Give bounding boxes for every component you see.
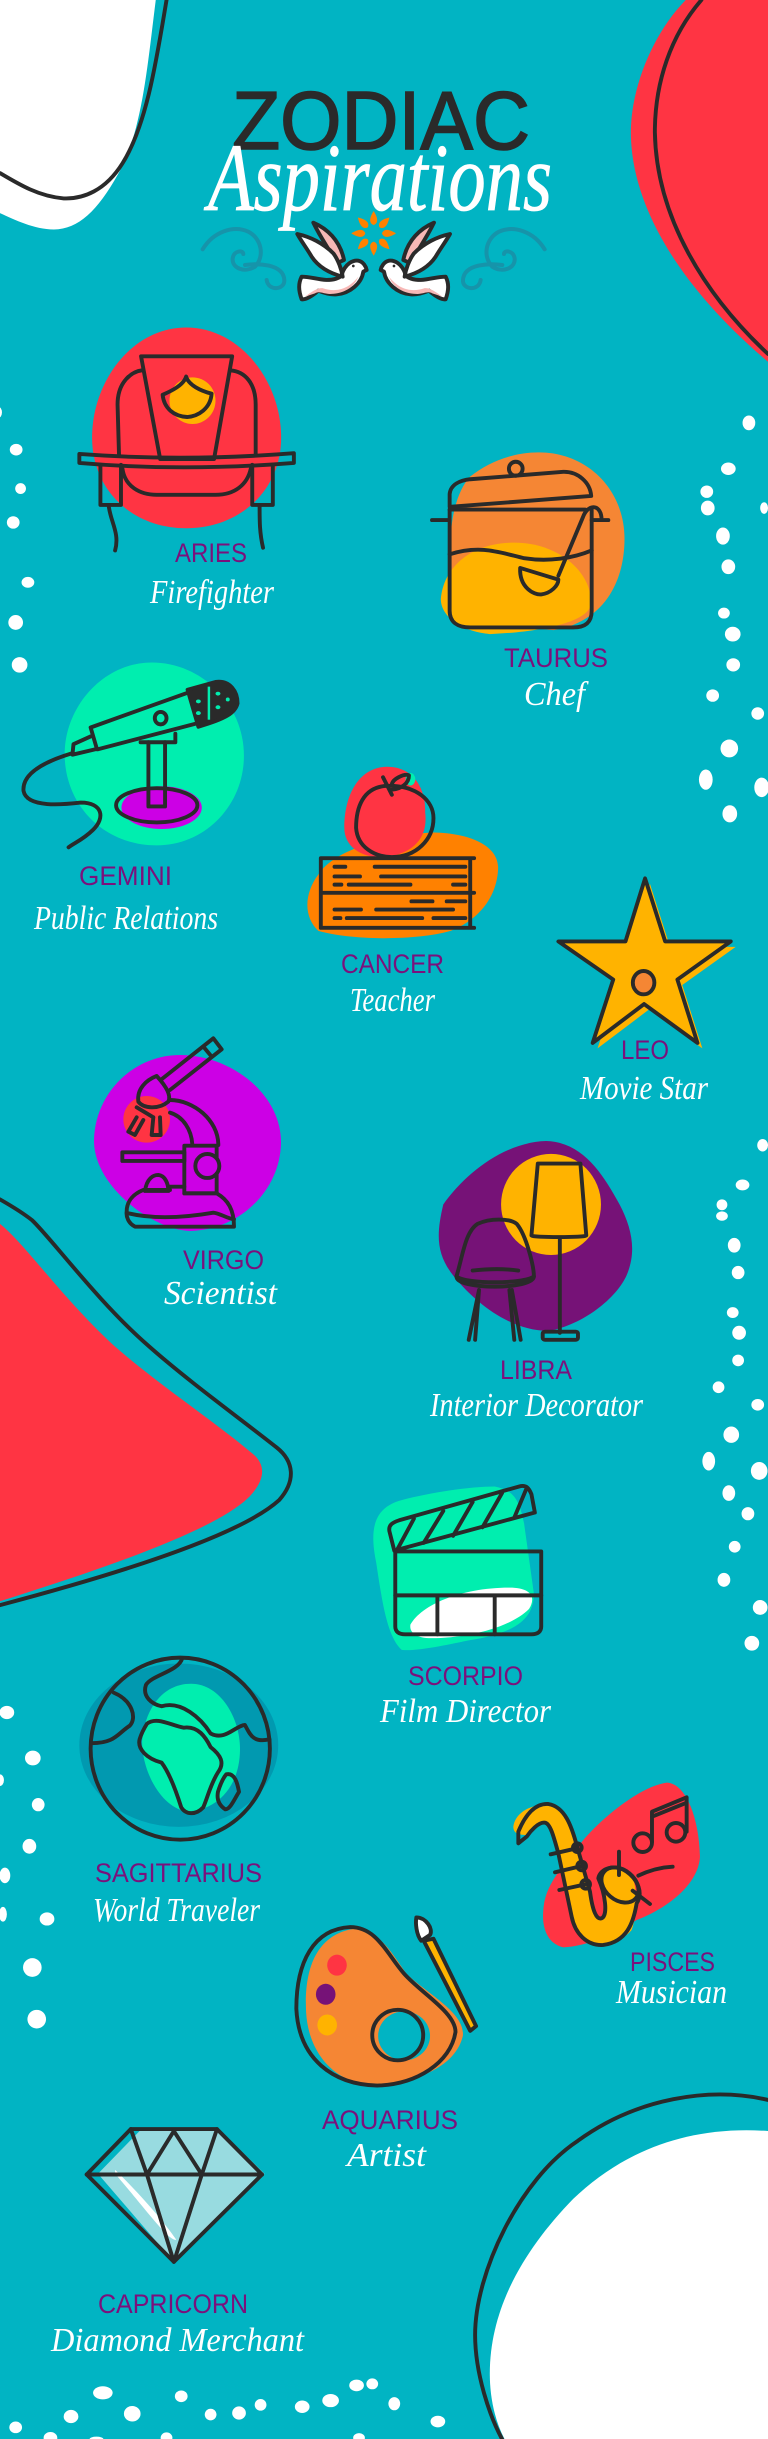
label: Scientist: Scientist xyxy=(164,1275,279,1312)
panel: pisces xyxy=(513,1783,727,2011)
label: Pisces: PISCES xyxy=(630,1947,715,1977)
label: Leo: LEO xyxy=(621,1035,669,1065)
title: Aspirations: Aspirations xyxy=(203,124,552,231)
blob: top right red xyxy=(631,0,768,362)
icon: microphone xyxy=(23,663,244,847)
icon: star xyxy=(558,878,736,1048)
panel: virgo xyxy=(94,1038,281,1312)
label: Diamond Merchant: Diamond Merchant xyxy=(50,2322,305,2359)
label: Taurus: TAURUS xyxy=(504,643,608,673)
icon: diamond xyxy=(87,2128,264,2262)
icon: clapperboard xyxy=(373,1486,541,1650)
panel: cancer xyxy=(307,767,498,1019)
label: Virgo: VIRGO xyxy=(183,1245,264,1275)
label: Film Director: Film Director xyxy=(379,1693,552,1730)
icon: paint palette and brush xyxy=(296,1917,476,2086)
panel: sagittarius xyxy=(79,1658,278,1929)
label: Movie Star: Movie Star xyxy=(579,1070,709,1107)
label: Teacher: Teacher xyxy=(350,982,436,1019)
label: Musician: Musician xyxy=(615,1974,727,2011)
label: Capricorn: CAPRICORN xyxy=(98,2289,248,2319)
icon: saxophone and notes xyxy=(513,1783,700,1947)
label: Chef: Chef xyxy=(524,676,589,713)
label: Firefighter: Firefighter xyxy=(149,574,275,611)
icon: apple on books xyxy=(307,767,498,938)
title: ZODIAC: ZODIAC xyxy=(232,74,530,167)
blob: top left white xyxy=(0,0,167,230)
label: Aquarius: AQUARIUS xyxy=(322,2105,458,2135)
icon: microscope xyxy=(94,1038,281,1231)
icon: firefighter helmet xyxy=(79,328,294,550)
panel: taurus xyxy=(432,452,624,713)
dots: bottom xyxy=(0,1839,445,2439)
label: Aries: ARIES xyxy=(175,538,247,568)
label: Cancer: CANCER xyxy=(341,949,444,979)
title block xyxy=(203,74,552,299)
dots: lower middle xyxy=(0,1238,768,1811)
icon: doves and sun ornament xyxy=(203,211,545,299)
label: World Traveler: World Traveler xyxy=(93,1892,261,1929)
label: Interior Decorator: Interior Decorator xyxy=(429,1387,644,1424)
panel: scorpio xyxy=(373,1486,552,1730)
label: Gemini: GEMINI xyxy=(79,861,172,891)
label: Scorpio: SCORPIO xyxy=(408,1661,523,1691)
panel: aries xyxy=(79,328,294,611)
panel: libra xyxy=(429,1141,644,1424)
panel: gemini xyxy=(23,663,244,937)
label: Libra: LIBRA xyxy=(500,1355,572,1385)
dots: upper middle xyxy=(8,608,768,1221)
blob: bottom right white xyxy=(475,2095,768,2439)
blob: left red xyxy=(0,1199,291,1605)
label: Sagittarius: SAGITTARIUS xyxy=(95,1858,262,1888)
dots: top section xyxy=(0,407,768,588)
label: Public Relations: Public Relations xyxy=(33,900,218,937)
icon: cooking pot xyxy=(432,452,624,634)
panel: leo xyxy=(558,878,736,1107)
panel: capricorn xyxy=(50,2128,305,2359)
icon: globe xyxy=(79,1658,278,1840)
label: Artist: Artist xyxy=(345,2137,428,2174)
icon: chair and floor lamp xyxy=(439,1141,632,1340)
panel: aquarius xyxy=(296,1917,476,2174)
